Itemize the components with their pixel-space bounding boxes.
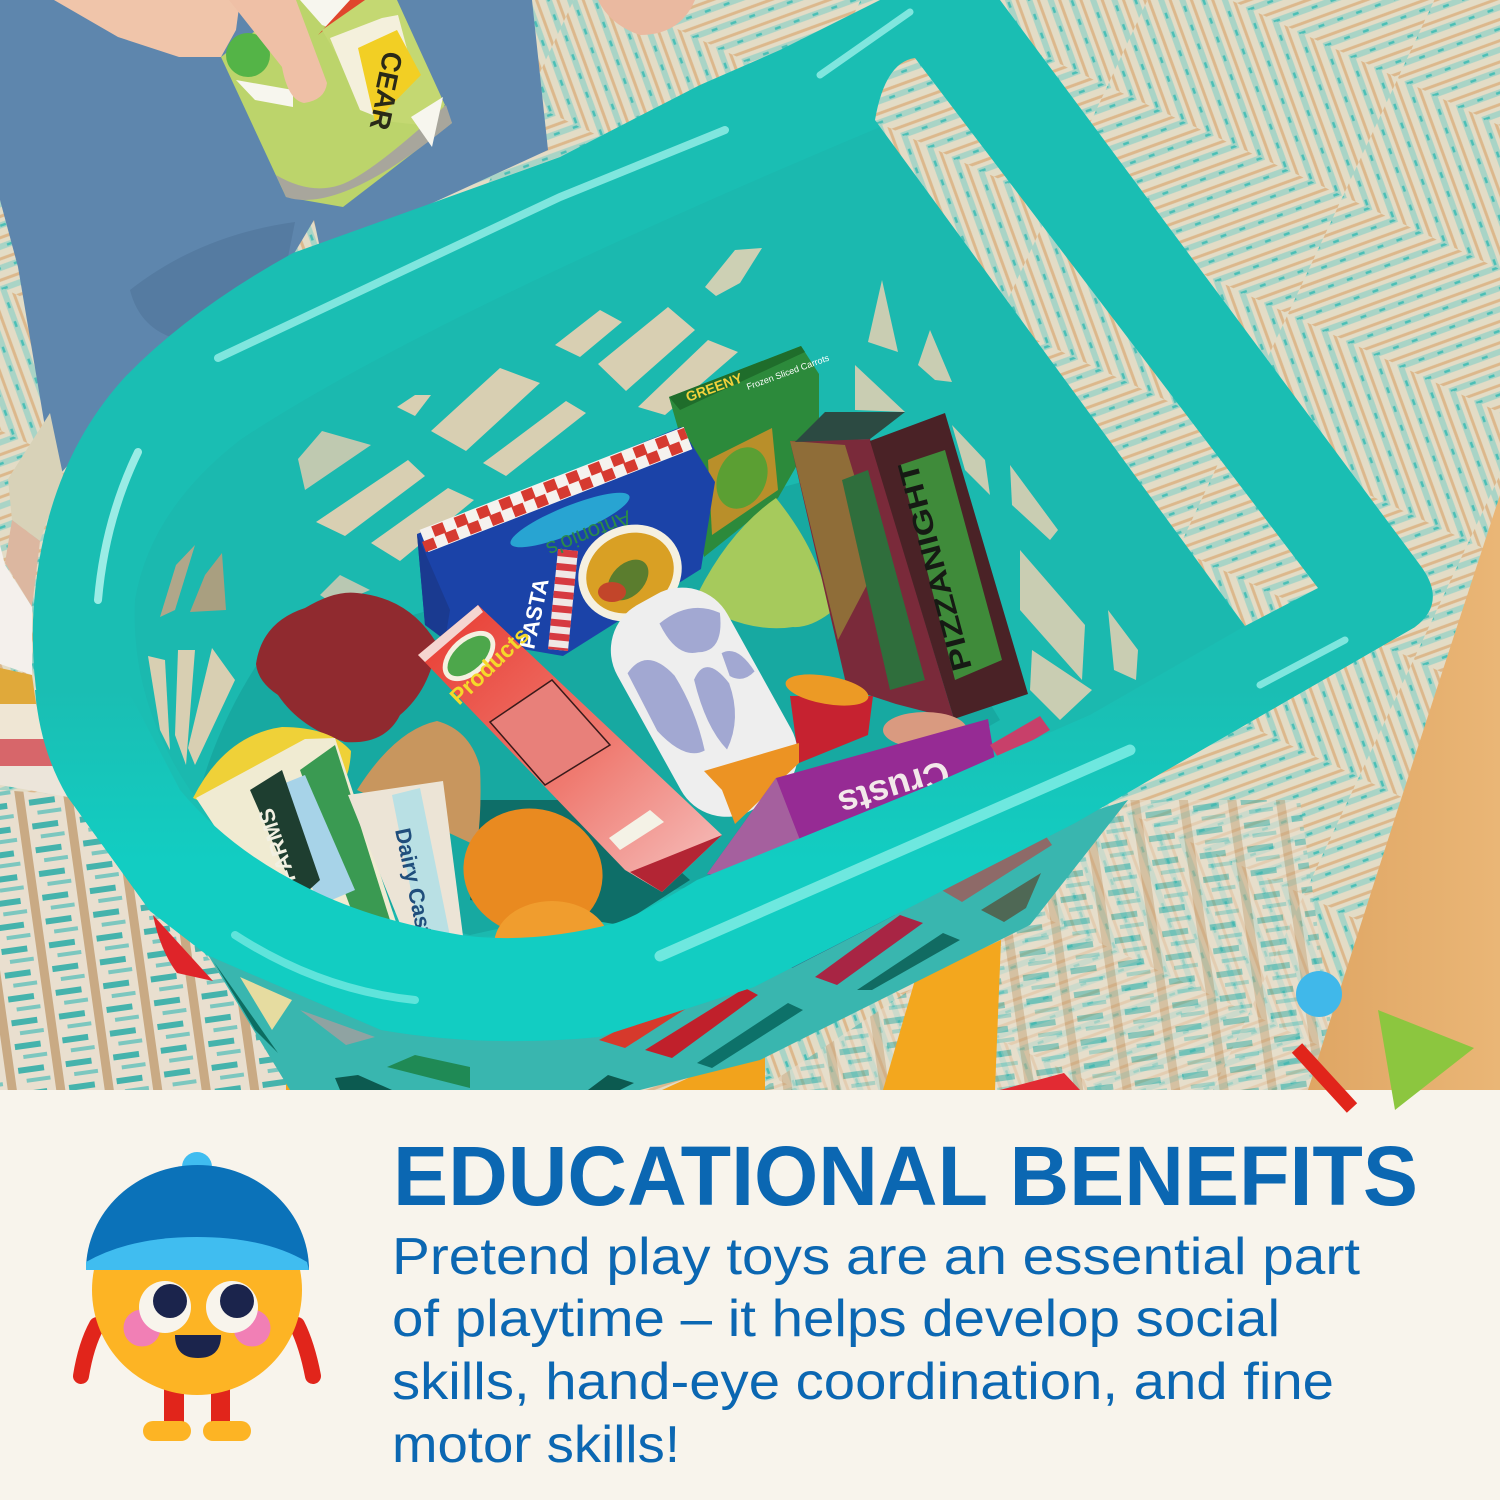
greeny frozen vegetables box: Frozen Sliced Carrots [745,353,831,392]
red cart foot [1000,1073,1080,1090]
eyes [139,1281,258,1333]
farms milk carton box: FARMS [253,805,301,886]
other hand at top [598,0,695,35]
toy can held by hand: CE [370,49,408,93]
green pear [698,498,830,628]
potato [357,721,481,846]
dairy castle box [348,781,463,938]
basket interior wall [135,125,1245,937]
mascot character [81,1152,313,1441]
red bottle [783,669,873,763]
finger on can [229,0,327,103]
yellow cart leg right [883,940,1001,1090]
blue pasta box [417,427,715,656]
greeny frozen vegetables box: GREENY [684,369,745,405]
red cart part [153,915,213,981]
dana products box [418,605,722,892]
child's jeans [0,0,548,473]
blue pasta box: PASTA [514,576,554,651]
pom-pom [182,1152,212,1182]
milk bottle with cow spots [610,588,796,817]
basket floor [200,470,1000,935]
pizza night box: PIZZANIGHT [892,459,978,674]
child's shoe [0,413,68,797]
lemon [193,727,351,800]
mouth [175,1335,221,1358]
second orange [494,901,604,938]
legs [164,1385,230,1427]
heading: EDUCATIONAL BENEFITS [393,1129,1418,1223]
jeans shading [130,222,295,340]
head [92,1185,302,1395]
red apple [256,593,437,742]
cheeks [124,1310,270,1346]
wooden floor [1308,495,1500,1090]
farms milk carton box [196,738,397,925]
hat brim [86,1237,309,1270]
onion [883,712,966,744]
photo: toy shopping basket on a rug [0,0,1500,1090]
child's hand at top [54,0,240,57]
dairy castle box: Dairy Cast [390,826,437,938]
pizza night box [790,412,1028,719]
purple crusts box: Crusts [834,752,955,825]
greeny frozen vegetables box [669,346,831,557]
dark floor shadow [470,800,690,925]
rim highlights [98,12,1345,1000]
rug background [0,0,1500,1090]
hat [86,1165,309,1270]
basket body and rim [33,0,1433,1041]
basket wall holes [148,248,1138,765]
decorative shapes: circle, bar, triangle [1296,971,1474,1110]
yellow cart leg back [286,1084,290,1090]
rug lower centre weave [760,800,1340,1090]
front basket rim [35,590,1415,1041]
dana products box: Products [444,622,534,710]
toy can held by hand: AR [364,87,402,133]
body text: motor skills! [392,1416,680,1474]
bottle cap [704,743,799,824]
purple crusts box [707,716,1050,890]
body text: of playtime – it helps develop social [392,1290,1280,1348]
bottom text panel [0,1090,1500,1500]
feet [143,1421,251,1441]
yellow cart leg left [662,1058,765,1090]
blue pasta box: Antonio's [543,505,635,562]
handle opening [875,58,1318,626]
body text [392,1228,1361,1474]
orange [463,808,603,926]
body text: Pretend play toys are an essential part [392,1228,1361,1286]
rug lower left weave [0,790,300,1090]
body text: skills, hand-eye coordination, and fine [392,1353,1334,1411]
lower basket mesh [205,800,1128,1090]
toy can held by hand [221,0,452,207]
left arm [81,1325,97,1376]
right arm [297,1325,313,1376]
